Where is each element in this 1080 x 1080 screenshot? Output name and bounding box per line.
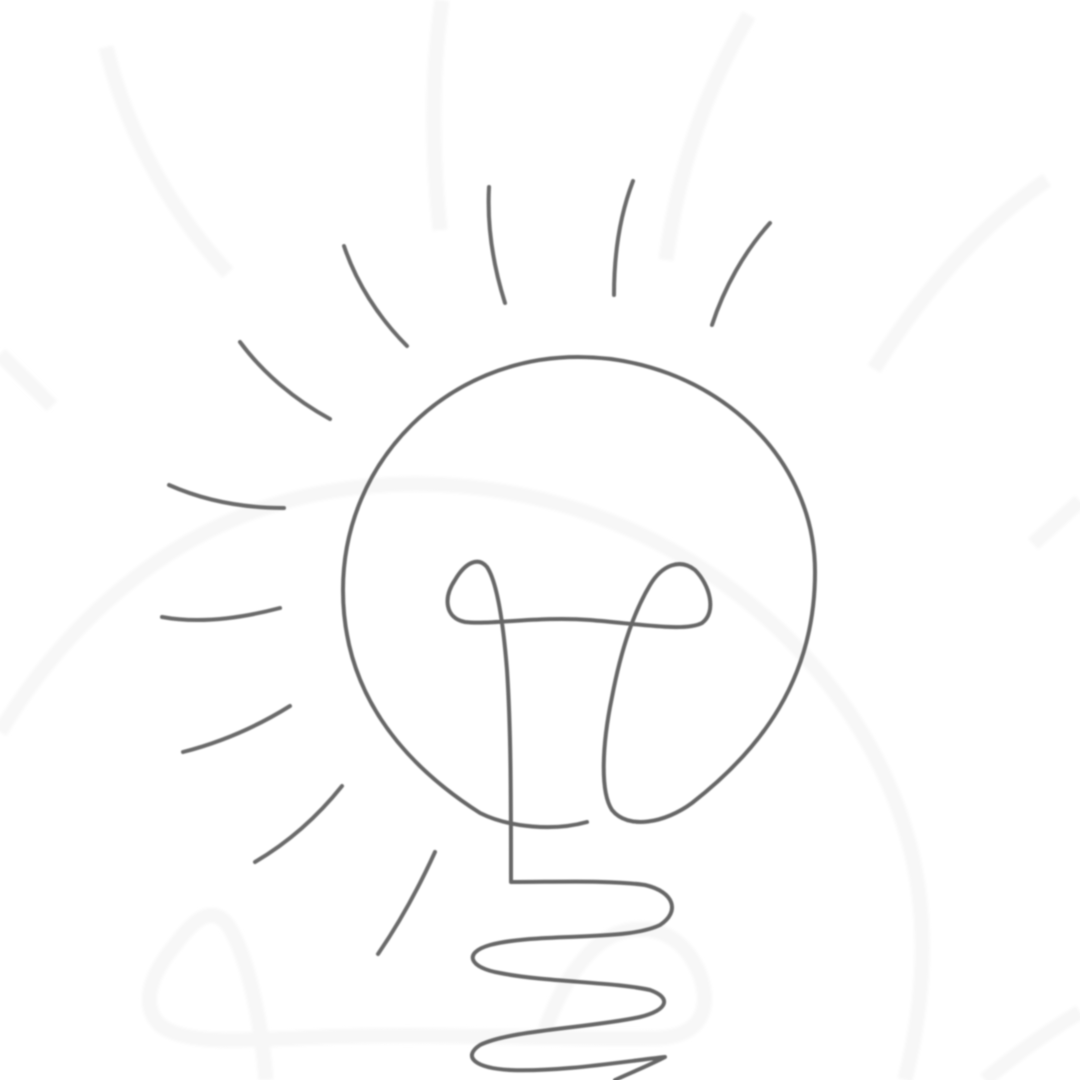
icon: bulb rays [162, 181, 770, 954]
icon: bulb outline, filament and screw base [343, 357, 815, 1080]
